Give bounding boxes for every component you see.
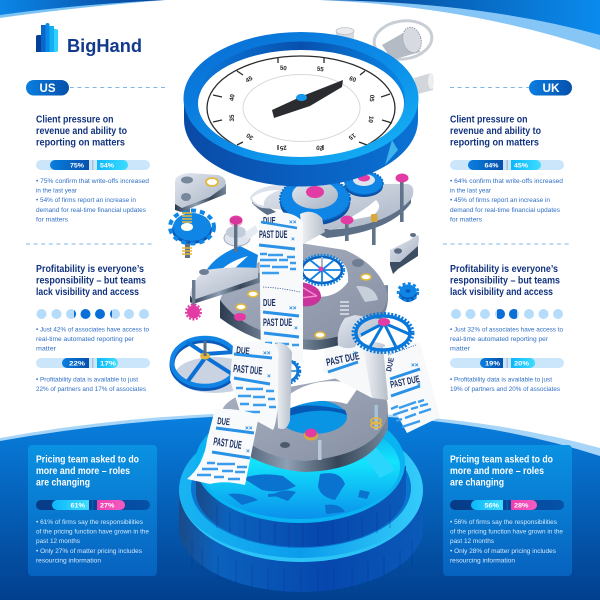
- heading: reporting on matters: [36, 137, 125, 148]
- button top: [336, 28, 354, 40]
- bezel glint: [385, 140, 398, 165]
- heading: Profitability is everyone’s: [36, 264, 144, 275]
- illustration: left mid assembly: [186, 216, 262, 320]
- bullet text: of the pricing function have grown in the: [450, 528, 563, 536]
- rings: [361, 274, 371, 280]
- small blue gear: [345, 172, 383, 197]
- screw: pink: [304, 430, 318, 440]
- paper: [259, 212, 303, 364]
- icon: small blue gear: [398, 284, 418, 302]
- outer ring cylinder: [179, 490, 423, 592]
- illustration: lower plate: [220, 372, 388, 472]
- illustration: top crescent plate: [250, 172, 413, 245]
- button right: [414, 73, 434, 94]
- curl: [275, 343, 292, 429]
- illustration: front left receipt: PAST DUE: [213, 435, 243, 451]
- illustration: lower left receipt: [230, 342, 292, 430]
- bullet text: [450, 326, 564, 352]
- bullet text: matter: [36, 346, 56, 352]
- illustration: globe base: [179, 430, 423, 592]
- bar: 56% and 28%: 28%: [514, 502, 529, 510]
- illustration: front left receipt: [187, 409, 259, 485]
- gold springs: [182, 213, 192, 254]
- bar: 75% and 54%: [36, 160, 150, 170]
- bar: 61% and 27%: [36, 500, 150, 510]
- bullet text: • 45% of firms report an increase in: [450, 197, 550, 204]
- bullet text: • 64% confirm that write-offs increased: [450, 178, 564, 185]
- illustration: tall receipt: PAST DUE: [263, 316, 292, 328]
- inner wall: [197, 42, 405, 156]
- blue gear: [170, 210, 214, 244]
- dial numbers: 35: [229, 114, 236, 121]
- bullet text: [36, 326, 150, 352]
- heading: lack visibility and access: [36, 287, 139, 298]
- heading: responsibility – but teams: [36, 276, 146, 286]
- panel: UK client pressure: [450, 114, 564, 223]
- plate top: [222, 372, 388, 461]
- heading: are changing: [36, 478, 90, 488]
- right blue gear: [353, 314, 413, 352]
- bottom blue band: [0, 412, 600, 600]
- plate side: [220, 412, 388, 472]
- illustration: tall receipt: ×: [291, 236, 295, 243]
- plate top: [250, 184, 413, 230]
- bullet text: • Only 27% of matter pricing includes: [36, 548, 142, 555]
- paper: [230, 342, 279, 430]
- bullet text: resourcing information: [450, 558, 516, 564]
- dial numbers: [228, 65, 375, 152]
- detail cut-out: [356, 286, 378, 302]
- plate side: [220, 285, 388, 350]
- illustration: tall receipt: ××: [289, 219, 297, 226]
- heading: revenue and ability to: [450, 126, 541, 137]
- illustration: tall receipt: PAST DUE: [259, 228, 288, 241]
- plate side: [252, 196, 411, 238]
- pin: gold rings: [371, 405, 381, 430]
- illustration: lower left receipt: ×: [267, 373, 271, 380]
- illustration: right receipt: ××: [411, 362, 419, 369]
- heading: [36, 114, 127, 148]
- bar: 61% and 27%: 27%: [100, 502, 115, 510]
- heading: Profitability is everyone’s: [450, 264, 558, 275]
- bullet text: for matters: [36, 216, 68, 223]
- dial scale: [207, 56, 395, 160]
- illustration: mid plate: [220, 243, 413, 352]
- curl: [300, 212, 325, 244]
- bullet text: 22% of partners and 17% of associates: [36, 386, 146, 393]
- bullet text: • 54% of firms report an increase in: [36, 197, 136, 204]
- stem: [185, 195, 190, 258]
- icon: logo bars: [36, 23, 58, 52]
- front panel: [383, 341, 440, 433]
- heading: [450, 264, 560, 298]
- plate: [175, 184, 226, 212]
- crown ring: [372, 17, 434, 63]
- illustration: lower left receipt: DUE: [236, 345, 251, 357]
- bullet text: [450, 519, 563, 564]
- heading: are changing: [450, 478, 504, 488]
- illustration: blue wheel: [172, 338, 300, 393]
- bar: 64% and 45%: [450, 160, 564, 170]
- case side: [184, 98, 418, 186]
- illustration: lower left receipt: PAST DUE: [233, 362, 263, 377]
- bullet text: [36, 519, 149, 564]
- dot chart: 42%: [36, 309, 149, 319]
- bar: 56% and 28%: [450, 500, 564, 510]
- panel: US client pressure: [36, 114, 150, 223]
- heading: lack visibility and access: [450, 287, 553, 298]
- plate top: [220, 243, 388, 340]
- illustration: right receipt: PAST DUE: [325, 350, 360, 368]
- pin and pink gear: [192, 280, 195, 308]
- illustration: top-left plate and gear: [170, 173, 226, 258]
- bar: 61% and 27%: 61%: [70, 502, 85, 510]
- bar: 56% and 28%: 56%: [484, 502, 499, 510]
- curl: [363, 342, 388, 400]
- bullet text: • Just 42% of associates have access to: [36, 326, 150, 334]
- ring lower lip: [179, 490, 423, 562]
- dial numbers: 55: [316, 66, 325, 74]
- lever plate: [190, 272, 262, 304]
- gold pin: [372, 222, 376, 245]
- pink gear: [300, 282, 321, 306]
- bar: 75% and 54%: 54%: [100, 162, 114, 170]
- bar: 22% and 17%: [36, 358, 150, 368]
- bullet text: • Only 28% of matter pricing includes: [450, 548, 556, 555]
- region label: UK: UK: [542, 83, 560, 95]
- small gear: [270, 358, 300, 384]
- bullet text: • Profitability data is available to just: [36, 376, 138, 384]
- dial numbers: 40: [228, 93, 237, 102]
- heading: reporting on matters: [450, 137, 539, 148]
- dial face: [198, 50, 404, 157]
- bar: 22% and 17%: 17%: [100, 360, 116, 368]
- inner cylinder: [196, 466, 406, 547]
- pink pin centre: [345, 222, 349, 241]
- bullet text: past 12 months: [450, 538, 494, 545]
- heading: revenue and ability to: [36, 126, 127, 137]
- bullet text: in the last year: [36, 188, 77, 194]
- top right wave: [318, 0, 600, 50]
- bullet text: demand for real-time financial updates: [450, 207, 560, 214]
- stopwatch hand: [272, 80, 343, 118]
- lever and spring: [338, 315, 385, 348]
- bullet text: • 56% of firms say the responsibilities: [450, 519, 557, 526]
- illustration: front left receipt: ×: [246, 448, 250, 455]
- back panel: [323, 346, 372, 398]
- illustration: right receipt: PAST DUE: [389, 373, 421, 390]
- bullet text: • 61% of firms say the responsibilities: [36, 519, 143, 526]
- bar: 75% and 54%: 75%: [70, 162, 84, 170]
- bullet text: [450, 178, 564, 223]
- lever: [390, 240, 418, 274]
- dial numbers: 45: [245, 75, 254, 84]
- bezel: [184, 32, 418, 165]
- dial numbers: 25: [279, 144, 287, 152]
- bullet text: in the last year: [450, 188, 491, 194]
- illustration: right receipt: [323, 341, 440, 433]
- heading: [36, 454, 139, 488]
- bullet text: past 12 months: [36, 538, 80, 545]
- illustration: right receipt: DUE: [385, 357, 396, 372]
- illustration: tall receipt: ×: [294, 325, 298, 332]
- bullet text: for matters: [450, 216, 482, 223]
- heading: [36, 264, 146, 298]
- pink pin right: [400, 180, 404, 222]
- illustration: front left receipt: DUE: [217, 416, 231, 428]
- outer ring top: [179, 418, 423, 562]
- logo wordmark: BigHand: [67, 36, 142, 56]
- bullet text: 19% of partners and 20% of associates: [450, 386, 560, 393]
- bullet text: • Just 32% of associates have access to: [450, 326, 564, 334]
- panel: US profitability: [36, 264, 150, 393]
- illustration: tall receipt: [259, 212, 325, 364]
- illustration: lower left receipt: ××: [263, 350, 271, 357]
- dot chart: 32%: [451, 309, 563, 319]
- disc and pink pin: [224, 230, 250, 246]
- heading: more and more – roles: [450, 466, 544, 477]
- globe face: [195, 403, 405, 523]
- blue wheel: hole gear: [300, 255, 344, 285]
- illustration: tall receipt: ××: [289, 305, 297, 312]
- bar: 64% and 45%: 64%: [484, 162, 499, 170]
- bar: 64% and 45%: 45%: [514, 162, 528, 170]
- heading: [450, 114, 541, 148]
- dial numbers: 15: [347, 131, 357, 141]
- bullet text: [450, 376, 560, 393]
- bar: 19% and 20%: 19%: [485, 360, 500, 368]
- bullet text: real-time automated reporting per: [450, 336, 548, 343]
- illustration: right receipt: ×: [353, 350, 357, 357]
- plate hole: [279, 400, 347, 434]
- dial numbers: 05: [368, 94, 375, 102]
- heading: Pricing team asked to do: [450, 454, 553, 465]
- bullet text: of the pricing function have grown in the: [36, 528, 149, 536]
- bar: 19% and 20%: 20%: [514, 360, 529, 368]
- bullet text: matter: [450, 346, 470, 352]
- heading: Client pressure on: [36, 114, 114, 125]
- dial numbers: 50: [279, 65, 288, 73]
- dial numbers: 60: [348, 75, 357, 84]
- bullet text: [36, 178, 150, 223]
- illustration: right receipt: ×: [417, 381, 421, 388]
- illustration: tall receipt: DUE: [263, 296, 276, 308]
- dial numbers: 20: [315, 143, 324, 152]
- dial numbers: 10: [366, 115, 375, 124]
- region label: US: [26, 80, 165, 96]
- bullet text: [36, 376, 146, 393]
- globe land: [228, 448, 395, 514]
- heading: responsibility – but teams: [450, 276, 560, 286]
- panel: UK profitability: [450, 264, 564, 393]
- region label: US: US: [40, 83, 56, 95]
- bullet text: demand for real-time financial updates: [36, 207, 146, 214]
- illustration: front left receipt: ××: [245, 425, 253, 432]
- bullet text: • Profitability data is available to just: [450, 376, 552, 384]
- logo: [36, 23, 142, 56]
- big blue gear: [280, 177, 350, 225]
- panel: UK pricing team: [443, 445, 572, 576]
- heading: more and more – roles: [36, 466, 130, 477]
- heading: Pricing team asked to do: [36, 454, 139, 465]
- bullet text: real-time automated reporting per: [36, 336, 134, 343]
- bullet text: resourcing information: [36, 558, 102, 564]
- illustration: stopwatch: [184, 17, 434, 186]
- panel: US pricing team: [28, 445, 157, 576]
- heading: [450, 454, 553, 488]
- top left wave: [0, 0, 165, 18]
- blue arc wheel: [201, 246, 258, 285]
- illustration: small parts on the right: [390, 233, 419, 302]
- heading: Client pressure on: [450, 114, 528, 125]
- plate centre hole: [300, 256, 348, 297]
- region label: UK: [450, 80, 572, 96]
- bar: 19% and 20%: [450, 358, 564, 368]
- illustration: tall receipt: DUE: [263, 216, 276, 226]
- bullet text: • 75% confirm that write-offs increased: [36, 178, 150, 185]
- dial numbers: 30: [245, 131, 255, 141]
- bar: 22% and 17%: 22%: [69, 360, 85, 368]
